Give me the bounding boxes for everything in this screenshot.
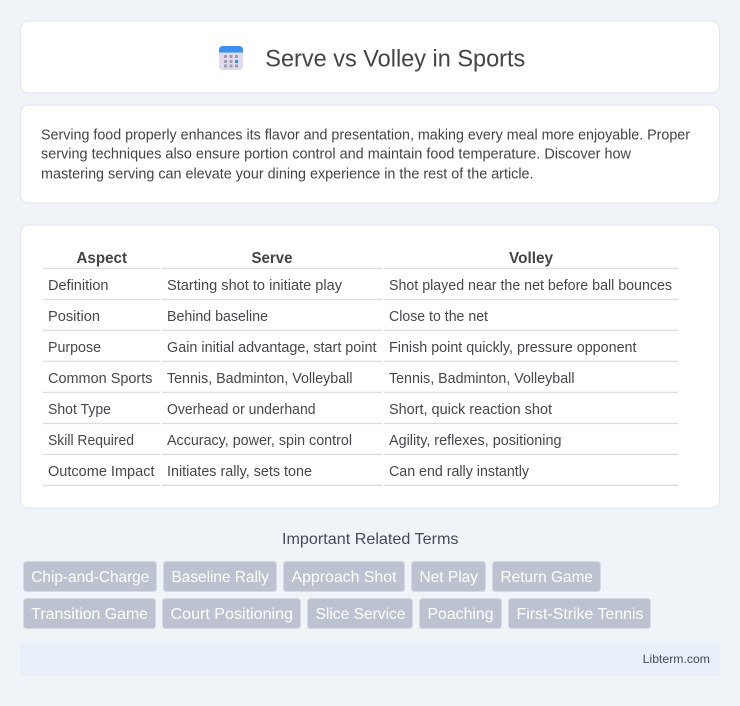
tag: Transition Game: [24, 598, 156, 628]
table row: Definition: Starting shot to initiate play: [167, 278, 343, 294]
tag: Baseline Rally: Baseline Rally: [172, 569, 269, 586]
tag: Court Positioning: Court Positioning: [170, 606, 293, 623]
table row: Purpose: Finish point quickly, pressure opponent: [389, 340, 636, 356]
tag: Baseline Rally: [164, 562, 276, 592]
table row: Shot Type: Shot Type: [48, 402, 111, 418]
tag: Net Play: Net Play: [420, 569, 478, 586]
text block: introduction: [41, 127, 690, 182]
table row: Outcome Impact: Can end rally instantly: [389, 464, 530, 480]
tag: Chip-and-Charge: Chip-and-Charge: [31, 569, 149, 586]
tag: Approach Shot: [284, 562, 404, 592]
table row: Shot Type: [43, 402, 678, 423]
table row: Definition: Definition: [48, 278, 108, 294]
table row: Outcome Impact: [43, 464, 678, 485]
table header row: Serve: [252, 250, 293, 267]
tag: Return Game: [492, 562, 600, 592]
tag: Slice Service: Slice Service: [316, 606, 406, 623]
table row: Definition: [43, 278, 678, 299]
panel: header: [20, 21, 720, 93]
tag group: related terms: [24, 562, 650, 628]
table row: Skill Required: Accuracy, power, spin control: [167, 433, 352, 449]
table row: Common Sports: [43, 371, 678, 392]
title: Serve vs Volley in Sports: [265, 46, 525, 73]
table header row: Volley: [509, 250, 553, 267]
tag: Slice Service: [308, 598, 412, 628]
table row: Position: Position: [48, 309, 100, 325]
footer credit: Libterm.com: [643, 652, 710, 666]
tag: Poaching: [420, 598, 502, 628]
heading: related terms: Important Related Terms: [282, 531, 458, 548]
tag: Court Positioning: [162, 598, 300, 628]
tag: First-Strike Tennis: [508, 598, 650, 628]
table row: Outcome Impact: Outcome Impact: [48, 464, 154, 480]
footer: [20, 642, 720, 676]
table row: Shot Type: Overhead or underhand: [167, 402, 316, 418]
table row: Common Sports: Tennis, Badminton, Volleyball: [389, 371, 574, 387]
table header row: Aspect: [76, 250, 128, 267]
table row: Outcome Impact: Initiates rally, sets tone: [167, 464, 312, 480]
panel: comparison table: [20, 225, 720, 508]
table row: Purpose: Purpose: [48, 340, 101, 356]
table row: Shot Type: Short, quick reaction shot: [389, 402, 552, 418]
tag: Approach Shot: Approach Shot: [292, 569, 397, 586]
table row: Position: Behind baseline: [167, 309, 268, 325]
table row: Skill Required: Skill Required: [48, 433, 134, 449]
tag: First-Strike Tennis: First-Strike Tennis: [516, 606, 644, 623]
table row: Definition: Shot played near the net before ball bounces: [389, 278, 672, 294]
text block: introduction: serving techniques also ensure portion control and maintain food temperature. Discover how: [41, 147, 632, 163]
tag: Return Game: Return Game: [500, 569, 593, 586]
table header row: [43, 250, 678, 268]
table row: Purpose: Gain initial advantage, start point: [167, 340, 376, 356]
table row: Position: [43, 309, 678, 330]
table row: Skill Required: Agility, reflexes, positioning: [389, 433, 562, 449]
tag: Poaching: Poaching: [428, 606, 494, 623]
tag: Net Play: [412, 562, 486, 592]
panel: introduction: [20, 105, 720, 203]
table row: Common Sports: Common Sports: [48, 371, 152, 387]
table row: Common Sports: Tennis, Badminton, Volleyball: [167, 371, 352, 387]
table row: Skill Required: [43, 433, 678, 454]
text block: introduction: mastering serving can elevate your dining experience in the rest of the article.: [41, 166, 534, 182]
tag: Transition Game: Transition Game: [31, 606, 148, 623]
table row: Purpose: [43, 340, 678, 361]
table row: Position: Close to the net: [389, 309, 488, 325]
tag: Chip-and-Charge: [24, 562, 156, 592]
icon: calendar: [219, 46, 243, 70]
text block: introduction: Serving food properly enhances its flavor and presentation, making every meal more enjoyable. Proper: [41, 127, 690, 143]
